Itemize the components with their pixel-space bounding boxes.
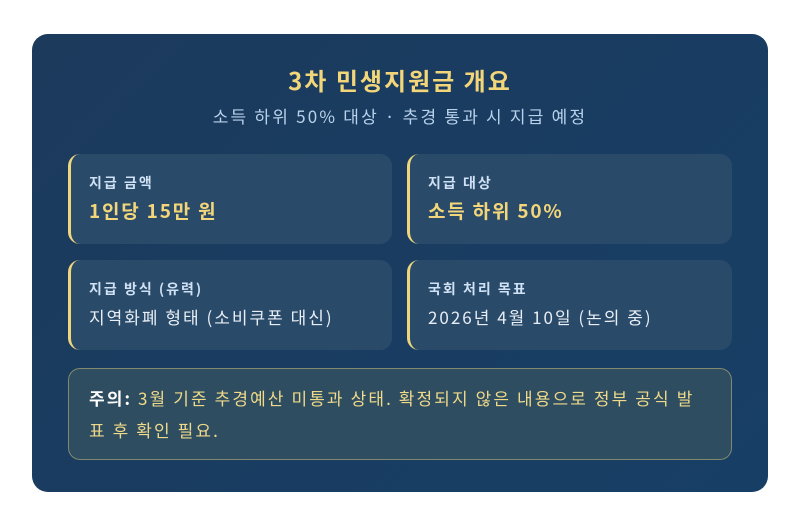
card: target	[407, 154, 732, 244]
subtitle: 소득 하위 50% 대상 · 추경 통과 시 지급 예정	[213, 103, 587, 128]
card: target: 지급 대상	[428, 173, 493, 193]
card: method	[68, 260, 392, 350]
callout: notice: 주의: 3월 기준 추경예산 미통과 상태. 확정되지 않은 내용으로 정부 공식 발	[89, 385, 694, 410]
card: schedule	[407, 260, 732, 350]
card: schedule: 2026년 4월 10일 (논의 중)	[428, 304, 653, 329]
card: method: 지역화폐 형태 (소비쿠폰 대신)	[89, 304, 334, 329]
card: amount: 1인당 15만 원	[89, 197, 217, 224]
card: amount	[68, 154, 392, 244]
card: amount: 지급 금액	[89, 173, 154, 193]
card: target: 소득 하위 50%	[428, 197, 563, 224]
card: schedule: 국회 처리 목표	[428, 279, 528, 299]
callout: notice: 표 후 확인 필요.	[89, 417, 220, 442]
card: method: 지급 방식 (유력)	[89, 279, 203, 299]
callout: notice	[68, 368, 732, 460]
title: 3차 민생지원금 개요	[288, 62, 512, 97]
